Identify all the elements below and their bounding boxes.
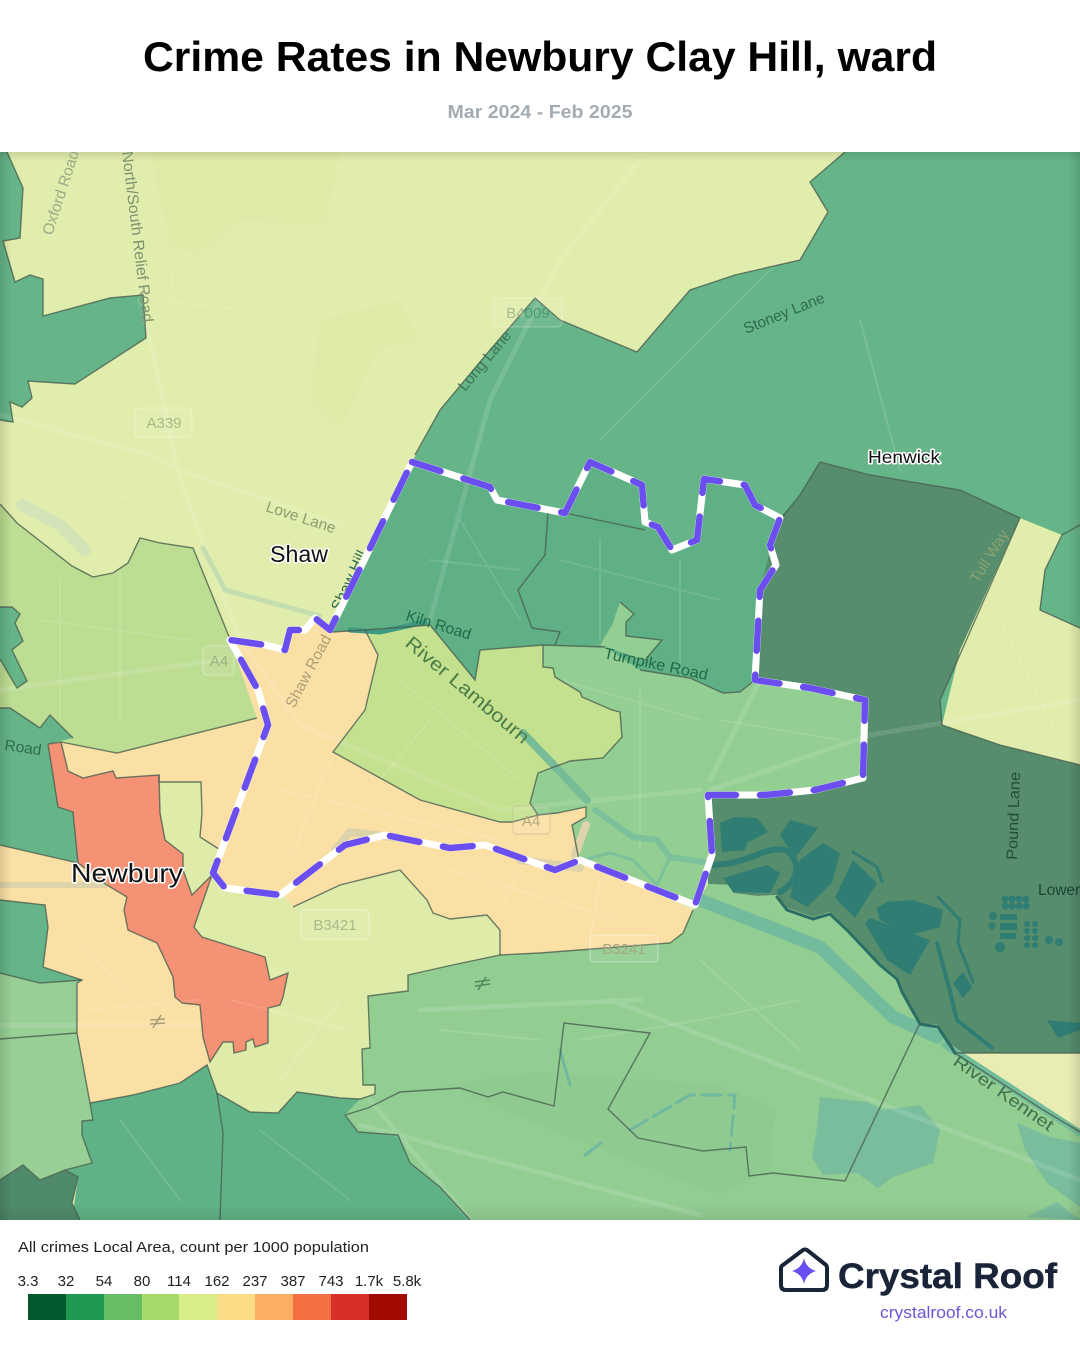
- tag A4 east: [513, 806, 550, 834]
- label Oxford Road: Oxford Road: [40, 148, 83, 237]
- map edge shading bottom: [0, 1212, 1080, 1220]
- legend tick labels: 387: [280, 1273, 306, 1290]
- label Pound Lane: Pound Lane: [1004, 772, 1024, 860]
- map edge shading top: [0, 152, 1080, 158]
- label North/South Relief Road: North/South Relief Road: [118, 150, 156, 323]
- icon: house with sparkle: [781, 1250, 827, 1290]
- tag A339: [135, 408, 192, 437]
- legend tick labels: 743: [318, 1273, 344, 1290]
- logo: Crystal Roof: [781, 1250, 1057, 1322]
- area: lime centre: [333, 625, 622, 822]
- area boundaries: [0, 152, 1080, 1220]
- river and industrial strips: [0, 505, 1080, 1155]
- place labels: [71, 447, 940, 888]
- tag B3241: B3241: [602, 941, 646, 958]
- tag A339: A339: [146, 415, 182, 432]
- area: south-west light greens: [0, 973, 93, 1180]
- label Stoney Lane: Stoney Lane: [741, 290, 827, 338]
- area: pale east field: [942, 518, 1080, 765]
- legend tick labels: 237: [242, 1273, 268, 1290]
- area: south green: [345, 884, 1080, 1220]
- streams: [709, 849, 992, 1053]
- ward boundary: [213, 462, 865, 905]
- area: dark green east: [708, 462, 1080, 1053]
- lakes and streams in dark area: [720, 817, 1080, 1038]
- airfield tint: [445, 1072, 775, 1195]
- legend tick labels: 114: [167, 1273, 191, 1290]
- label Kiln Road: Kiln Road: [404, 608, 473, 643]
- area: top-left greens: [0, 152, 146, 422]
- ward boundary: purple dashes: [213, 462, 865, 905]
- area: far-east green: [1040, 525, 1080, 628]
- logo wordmark: Crystal Roof: [838, 1257, 1057, 1296]
- road and river labels: [3, 148, 1080, 1135]
- label Long Lane: Long Lane: [455, 328, 515, 395]
- label Love Lane: Love Lane: [264, 499, 338, 537]
- area: west peach: [0, 845, 210, 1103]
- roads and streets: [0, 160, 1080, 1220]
- tag A4 west: [203, 646, 234, 675]
- legend tick labels: [18, 1273, 422, 1290]
- legend tick labels: 1.7k: [355, 1273, 384, 1290]
- area: ward south light green: [530, 645, 865, 905]
- area: south-east pale patch: [955, 1053, 1080, 1132]
- place: Henwick: Henwick: [868, 447, 940, 467]
- legend colour bar: [28, 1294, 407, 1320]
- panel: choropleth map: [0, 148, 1080, 1220]
- legend tick labels: 162: [204, 1273, 230, 1290]
- area: Newbury red: [48, 742, 288, 1062]
- legend title: All crimes Local Area, count per 1000 population: [18, 1239, 369, 1256]
- label Shaw Road: Shaw Road: [283, 632, 335, 711]
- label Shaw Hill: Shaw Hill: [328, 548, 371, 614]
- tag A4 west: A4: [210, 653, 228, 670]
- lakes in south fields: [812, 1097, 1080, 1220]
- place: Newbury: Newbury: [71, 858, 183, 888]
- tag A4 east: A4: [522, 813, 540, 830]
- tag B3241: [590, 935, 658, 962]
- road tags: [135, 298, 658, 962]
- label River Lambourn: River Lambourn: [401, 633, 533, 748]
- title: Crime Rates in Newbury Clay Hill, ward: [143, 33, 937, 80]
- left map edge shading: [0, 152, 8, 1220]
- area: north-east medium green including ward north: [414, 152, 1080, 788]
- faint farmland tint: [150, 152, 420, 430]
- ward boundary: white casing: [213, 462, 865, 905]
- legend tick labels: 54: [96, 1273, 112, 1290]
- label Turnpike Road: Turnpike Road: [602, 645, 709, 684]
- tag B3421: B3421: [313, 917, 357, 934]
- area: west edge green: [0, 607, 27, 688]
- area: bottom-left green: [65, 1065, 470, 1220]
- legend tick labels: 80: [134, 1273, 150, 1290]
- legend tick labels: 3.3: [18, 1273, 38, 1290]
- area: lime south: [194, 870, 500, 1113]
- map base: pale yellow-green area: [0, 152, 938, 1206]
- label Tull Way: Tull Way: [967, 527, 1013, 586]
- tag B4009: B4009: [506, 305, 550, 322]
- website url: crystalroof.co.uk: [880, 1304, 1008, 1322]
- rail station symbols: [150, 977, 490, 1028]
- place: Shaw: Shaw: [270, 541, 328, 567]
- legend tick labels: 5.8k: [393, 1273, 422, 1290]
- tanks: [1002, 896, 1008, 902]
- label River Kennet: River Kennet: [950, 1052, 1058, 1135]
- area: ward north green: [332, 462, 780, 693]
- legend tick labels: 32: [58, 1273, 74, 1290]
- tag B4009: [494, 298, 562, 327]
- label Lower: Lower: [1038, 882, 1080, 899]
- area: bottom-left dark: [0, 1165, 80, 1220]
- area: small enclave: [600, 602, 662, 660]
- right map edge shading: [1072, 152, 1080, 1220]
- tag B3421: [301, 910, 369, 939]
- legend: [18, 1239, 422, 1320]
- label Road at west edge: Road: [3, 737, 43, 759]
- area: pale patch near Newbury: [159, 782, 222, 895]
- area: central peach: [61, 620, 693, 955]
- subtitle: date range: Mar 2024 - Feb 2025: [448, 102, 632, 122]
- area: south-west green: [0, 708, 82, 983]
- area: west light green: [0, 504, 262, 753]
